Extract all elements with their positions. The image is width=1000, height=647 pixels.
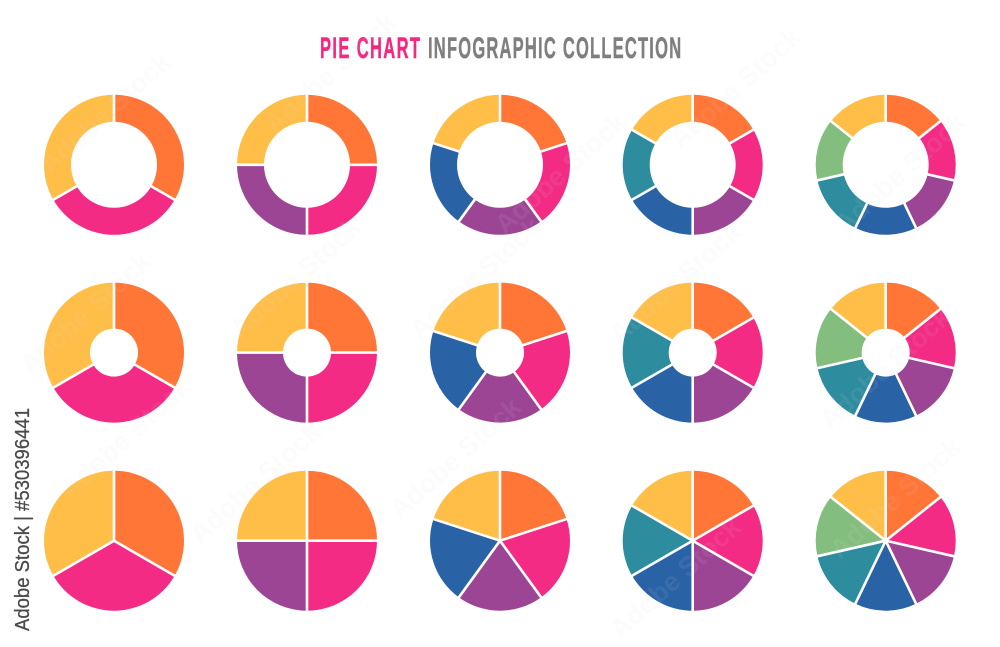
donut chart row 1, 4 segments xyxy=(235,93,379,237)
thick donut chart row 2, 3 segments xyxy=(44,281,184,423)
donut chart row 1, 7 segments xyxy=(816,93,956,235)
thick donut chart row 2, 6 segments xyxy=(623,281,763,425)
pie chart row 3, 7 segments xyxy=(816,469,956,611)
thick donut chart row 2, 5 segments xyxy=(430,281,570,423)
faint repeating watermark: Adobe Stock xyxy=(259,6,402,139)
faint repeating watermark: Adobe Stock xyxy=(184,416,327,549)
stock id side text: Adobe Stock | #530396441 xyxy=(12,408,34,631)
title: infographic collection: INFOGRAPHIC COLLECTION xyxy=(428,32,681,65)
pie chart row 3, 5 segments xyxy=(430,469,570,611)
faint repeating watermark: Adobe Stock xyxy=(54,371,197,504)
donut chart row 1, 5 segments xyxy=(430,93,570,235)
pie chart row 3, 3 segments xyxy=(44,469,184,611)
faint repeating watermark: Adobe Stock xyxy=(34,46,177,179)
donut chart row 1, 6 segments xyxy=(623,93,763,237)
faint repeating watermark: Adobe Stock xyxy=(14,246,157,379)
faint repeating watermark: Adobe Stock xyxy=(384,391,527,524)
faint repeating watermark: Adobe Stock xyxy=(604,511,747,644)
faint repeating watermark: Adobe Stock xyxy=(224,211,367,344)
faint repeating watermark: Adobe Stock xyxy=(489,106,632,239)
title: pie chart: PIE CHART xyxy=(320,32,420,65)
thick donut chart row 2, 4 segments xyxy=(235,281,379,425)
donut chart row 1, 3 segments xyxy=(44,93,184,235)
faint repeating watermark: Adobe Stock xyxy=(664,21,807,154)
faint repeating watermark: Adobe Stock xyxy=(829,106,972,239)
thick donut chart row 2, 7 segments xyxy=(816,281,956,423)
faint repeating watermark: Adobe Stock xyxy=(824,431,967,564)
title xyxy=(320,32,681,65)
pie chart row 3, 4 segments xyxy=(235,469,379,613)
pie chart row 3, 6 segments xyxy=(623,469,763,613)
faint repeating watermark: Adobe Stock xyxy=(404,211,547,344)
faint repeating watermark: Adobe Stock xyxy=(814,301,957,434)
faint repeating watermark: Adobe Stock xyxy=(604,216,747,349)
